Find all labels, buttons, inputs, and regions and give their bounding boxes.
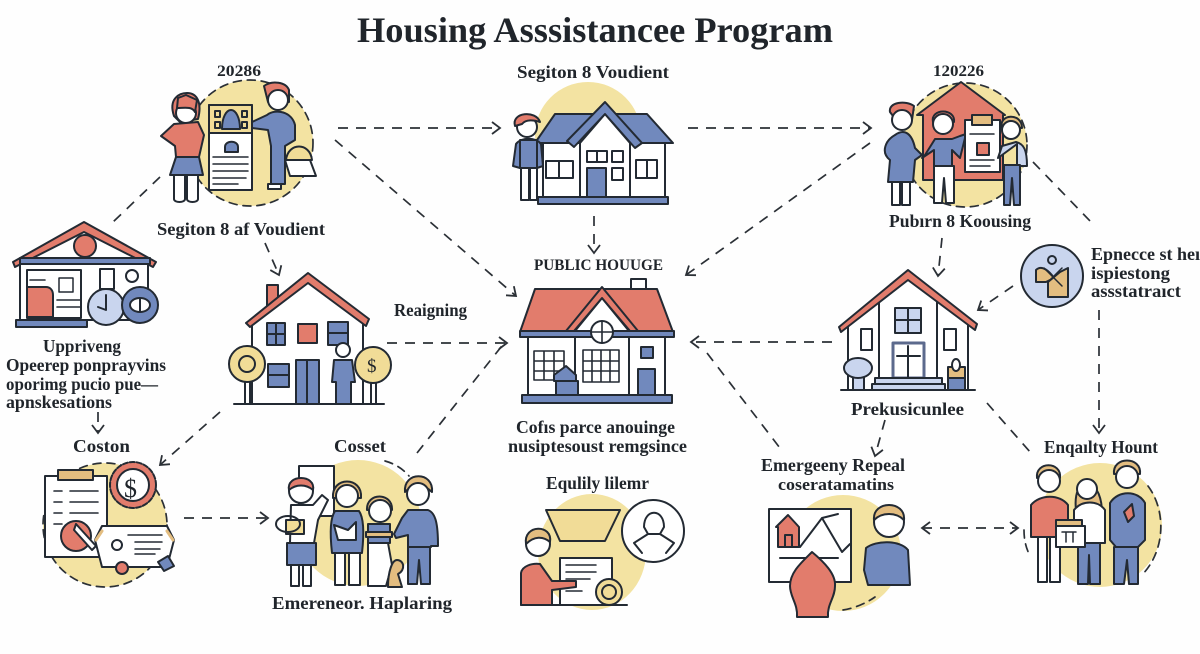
label: Enqaılty Hount: Enqaılty Hount — [1044, 437, 1158, 457]
panel: top-left voucher applicants — [161, 80, 316, 206]
label: Emergeeny Repeal block — [761, 455, 905, 494]
icon: round sign — [844, 358, 872, 390]
label: Emereneor. Haplaring: Emereneor. Haplaring — [272, 593, 452, 613]
label: Coston: Coston — [73, 436, 130, 456]
icon: man with bag — [252, 83, 316, 189]
label: Emergeeny Repeal block: Emergeeny Repeal — [761, 455, 905, 475]
icon: application document — [209, 105, 252, 190]
label: Equlily lilemr: Equlily lilemr — [546, 473, 649, 493]
panel: top-right housing signing — [885, 82, 1027, 207]
panel: right circle icon with text — [1021, 245, 1083, 307]
label: left description block — [6, 336, 166, 412]
label: 20286: 20286 — [217, 63, 261, 80]
icon: person with box — [276, 478, 328, 586]
icon: woman with papers — [331, 482, 363, 585]
panel: right house — [839, 270, 977, 390]
icon: resident figure — [332, 343, 355, 404]
label: left description block: Opeerep ponprayvins — [6, 355, 166, 375]
icon: woman applicant — [161, 93, 204, 202]
icon: eye circle — [122, 287, 158, 323]
icon: person by house — [513, 114, 543, 200]
label: right description: ispiestong — [1091, 263, 1170, 283]
icon: advisor — [864, 505, 910, 585]
icon: right person — [998, 117, 1027, 205]
label: PUBLIC HOUUGE: PUBLIC HOUUGE — [534, 257, 663, 274]
label: center description — [508, 417, 687, 456]
icon: clock — [88, 289, 124, 325]
arrows between program nodes — [98, 128, 1099, 528]
panel: left operations building — [13, 222, 158, 327]
icon: person right — [1110, 460, 1145, 584]
label: Prekusicunlee: Prekusicunlee — [851, 399, 964, 419]
label: left description block: oporimg pucio pue— — [6, 374, 159, 394]
icon: box with label — [1056, 520, 1085, 547]
icon: red house backdrop — [917, 82, 1005, 180]
icon: left person handshake — [885, 103, 922, 205]
label: Pubirn 8 Koousing: Pubırn 8 Koousing — [889, 211, 1031, 231]
label: Segiton 8 af Voudient: Segiton 8 af Voudient — [157, 219, 325, 239]
label: left description block: apnskesations — [6, 392, 112, 412]
panel: top-center voucher house — [513, 82, 673, 204]
icon: form with coin — [560, 558, 622, 605]
icon: small entry hut — [554, 366, 578, 395]
label: Segiton 8 Voudient: Segiton 8 Voudient — [517, 62, 669, 82]
label: right description: assstatraıct — [1091, 281, 1181, 301]
panel: center-left house with coins — [229, 273, 391, 404]
icon: mailbox parcel — [948, 359, 965, 390]
label: right description: Epnecce st heı — [1091, 244, 1200, 264]
label: center description: Cofıs parce anouinge — [516, 417, 675, 437]
panel: bottom-right group — [1024, 460, 1162, 587]
icon: coin sign right — [355, 347, 391, 404]
label: 120226: 120226 — [933, 63, 984, 80]
icon: person left — [1031, 465, 1068, 582]
icon: coin sign left — [229, 346, 265, 404]
label: right description — [1091, 244, 1200, 301]
icon: red hand shape — [790, 552, 835, 617]
icon: certificate — [95, 526, 174, 574]
panel: center public housing house — [520, 279, 674, 403]
panel: cost documents — [43, 462, 174, 587]
label: Emergeeny Repeal block: coseratamatins — [778, 475, 894, 494]
panel: bottom-center assistance — [521, 494, 684, 610]
icon: clipboard with red square — [965, 115, 1000, 172]
panel: bottom emergency chart — [769, 495, 910, 617]
icon: person center — [1074, 479, 1105, 584]
icon: man standing — [394, 476, 438, 584]
panel: family group — [276, 460, 438, 587]
icon: dollar gear badge: $ — [124, 474, 137, 503]
icon: speech circle — [622, 500, 684, 562]
label: Reaigning: Reaigning — [394, 300, 467, 320]
icon: child and dog — [366, 496, 403, 587]
icon: person at desk — [521, 529, 576, 605]
label: left description block: Uppriveng — [43, 336, 121, 356]
title: Housing Asssistancee Program — [357, 10, 833, 50]
label: center description: nusiptesoust remgsince — [508, 436, 687, 456]
icon: coin sign right: $ — [367, 356, 376, 377]
icon: center person — [922, 112, 966, 203]
label: Cosset: Cosset — [334, 436, 386, 456]
